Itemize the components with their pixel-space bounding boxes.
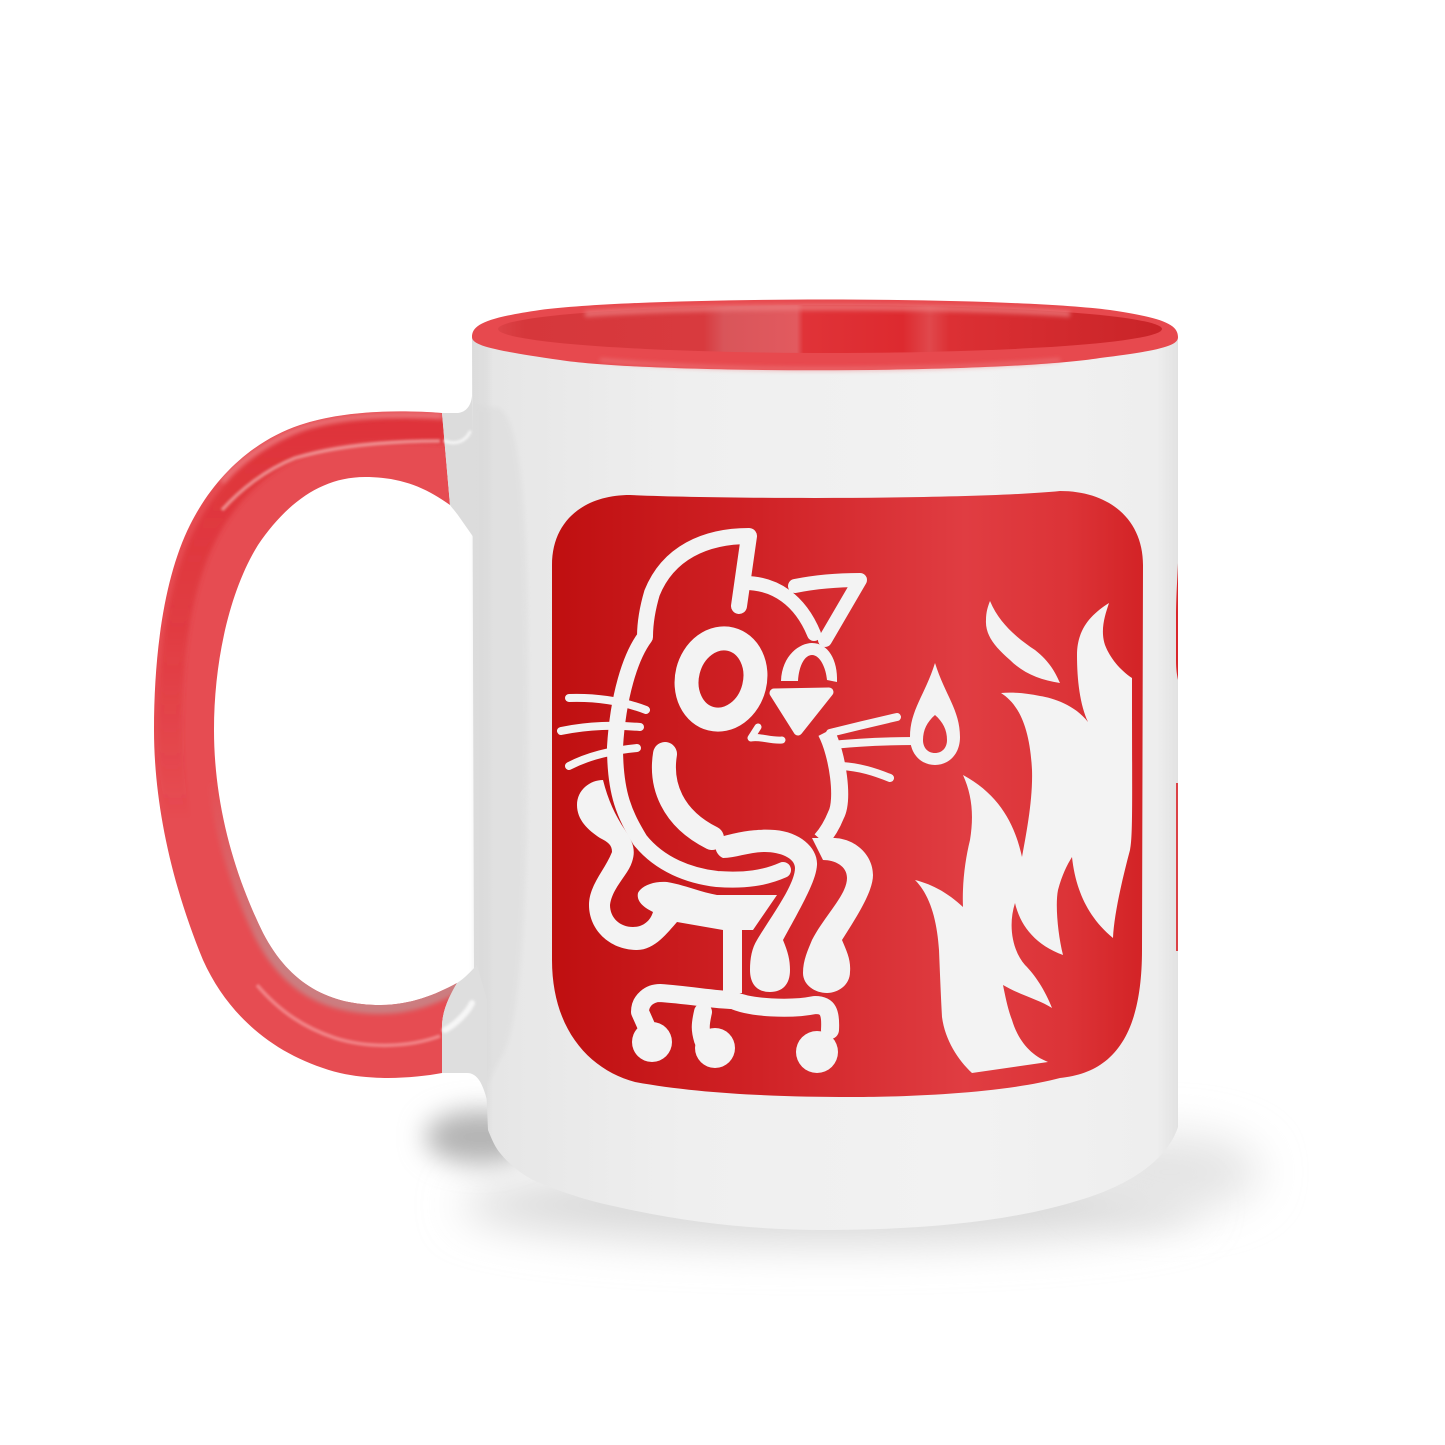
right whiskers and match stem xyxy=(830,717,915,778)
chair wheels xyxy=(632,1022,672,1062)
cat right body side xyxy=(821,732,840,840)
cat back leg and foot xyxy=(803,838,873,993)
product image: mug xyxy=(154,300,1261,1260)
handle joint highlights xyxy=(445,432,472,1030)
mug rim xyxy=(472,300,1178,370)
handle highlights xyxy=(222,441,440,510)
small flame xyxy=(986,601,1060,683)
mug handle xyxy=(154,411,457,1078)
cat body outline with ear xyxy=(615,536,783,880)
handle attachment top xyxy=(442,396,474,538)
chair back and seat xyxy=(577,780,777,993)
cat front leg and foot xyxy=(715,830,817,992)
handle attachment band on body xyxy=(474,405,528,1085)
cat on office chair xyxy=(561,536,915,1040)
cat winking eye xyxy=(781,643,837,682)
mug body xyxy=(472,337,1178,1230)
fire flames xyxy=(915,601,1132,1073)
printed red panel xyxy=(552,491,1143,1097)
cat arm xyxy=(664,754,712,838)
cat eye xyxy=(678,631,764,727)
match flame drop xyxy=(910,663,960,765)
mug interior xyxy=(498,305,1162,353)
second graphic fragment at mug edge xyxy=(1176,563,1178,951)
left whiskers xyxy=(561,698,646,766)
cast shadow under mug xyxy=(425,1110,1260,1243)
handle inner lower edge xyxy=(216,809,457,1016)
cat nose xyxy=(774,692,829,731)
large flame xyxy=(915,603,1132,1073)
handle attachment bottom xyxy=(442,965,487,1100)
cat head and right ear xyxy=(745,580,860,640)
cat mouth xyxy=(751,727,782,740)
handle upper shading xyxy=(160,418,444,734)
chair back, seat, legs and wheels xyxy=(577,780,873,1073)
chair base xyxy=(640,993,830,1040)
